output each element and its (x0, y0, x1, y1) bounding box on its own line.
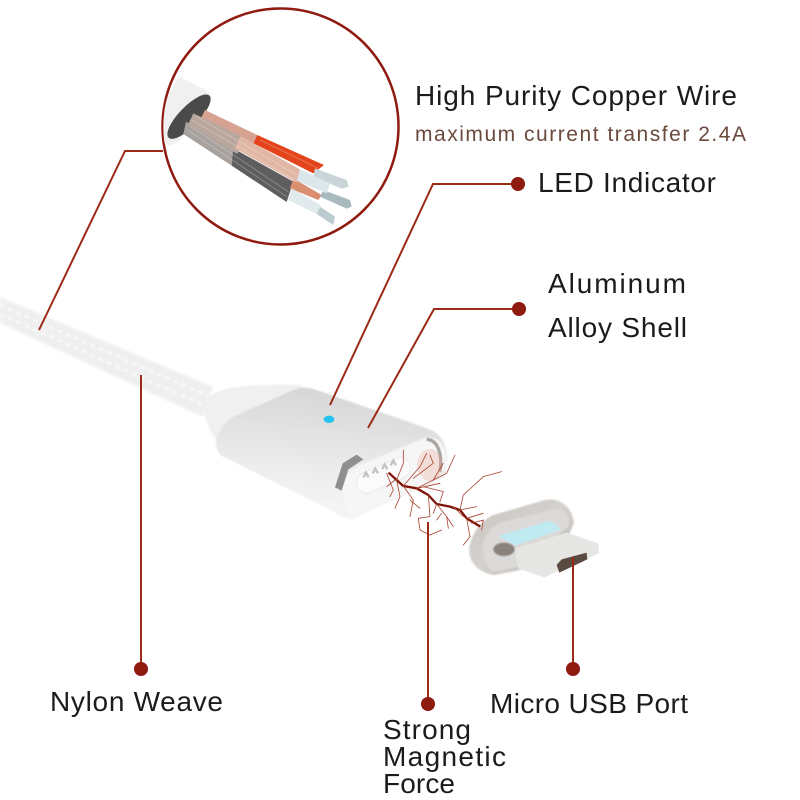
lightning effect (387, 449, 502, 545)
label: aluminum alloy shell: Alloy Shell (548, 312, 687, 343)
aluminum shell (216, 388, 447, 519)
silver conductor lower (288, 188, 321, 214)
glow on face (417, 449, 443, 481)
subheading: current transfer: maximum current transfer 2.4A (415, 123, 746, 146)
gold ring band (427, 439, 441, 472)
contact pins (363, 461, 396, 477)
leader line: nylon weave (140, 375, 142, 669)
LED indicator light (324, 416, 334, 423)
red core front (253, 135, 324, 173)
silver conductor right (320, 190, 352, 209)
inner head highlight (483, 508, 569, 572)
cable jacket (160, 76, 212, 145)
connector housing (204, 385, 447, 519)
plug body (515, 533, 599, 577)
bolt branches (387, 450, 502, 545)
magnetic face (343, 437, 447, 517)
jacket opening (167, 94, 211, 139)
copper wires (160, 76, 352, 225)
main bolt (389, 473, 479, 526)
circle outline (162, 8, 398, 244)
strain relief collar (204, 385, 310, 443)
micro USB tip (469, 499, 599, 577)
silver conductor lower tip (317, 207, 335, 225)
label: nylon weave: Nylon Weave (50, 686, 223, 717)
leader line: magnetic force (427, 522, 429, 704)
magnetic head (469, 499, 574, 575)
dark core rear (183, 122, 237, 166)
dark recess (493, 543, 515, 556)
label: LED indicator: LED Indicator (538, 167, 716, 198)
blue reflection (498, 521, 562, 546)
marker dot: magnetic (421, 697, 435, 711)
leader line: copper wire (39, 151, 163, 330)
label: aluminum alloy shell: Aluminum (548, 268, 686, 299)
label: strong magnetic force: Strong (383, 714, 471, 745)
heading: copper wire: High Purity Copper Wire (415, 80, 737, 111)
braided nylon cable (0, 297, 213, 417)
red core rear (200, 110, 257, 143)
leader line: LED indicator (330, 184, 518, 405)
copper tip sliver (290, 178, 322, 200)
label: strong magnetic force: Force (383, 768, 455, 799)
marker dot: USB (566, 662, 580, 676)
marker dot: aluminum (512, 302, 526, 316)
dark side band (335, 455, 363, 491)
contact slot (353, 454, 413, 496)
leader line: micro USB (572, 557, 574, 669)
marker dot: nylon (134, 662, 148, 676)
pink core rear (188, 113, 243, 154)
plug opening (557, 553, 587, 573)
leader line: aluminum shell (368, 309, 519, 428)
magnified wire circle (160, 8, 398, 244)
dark core front (232, 148, 293, 202)
wire strand lines (187, 117, 318, 197)
label: strong magnetic force: Magnetic (383, 741, 506, 772)
pink core front (235, 136, 300, 183)
label: micro USB port: Micro USB Port (490, 688, 688, 719)
silver conductor middle (297, 169, 330, 193)
marker dot: LED (511, 177, 525, 191)
silver conductor top (313, 168, 349, 189)
